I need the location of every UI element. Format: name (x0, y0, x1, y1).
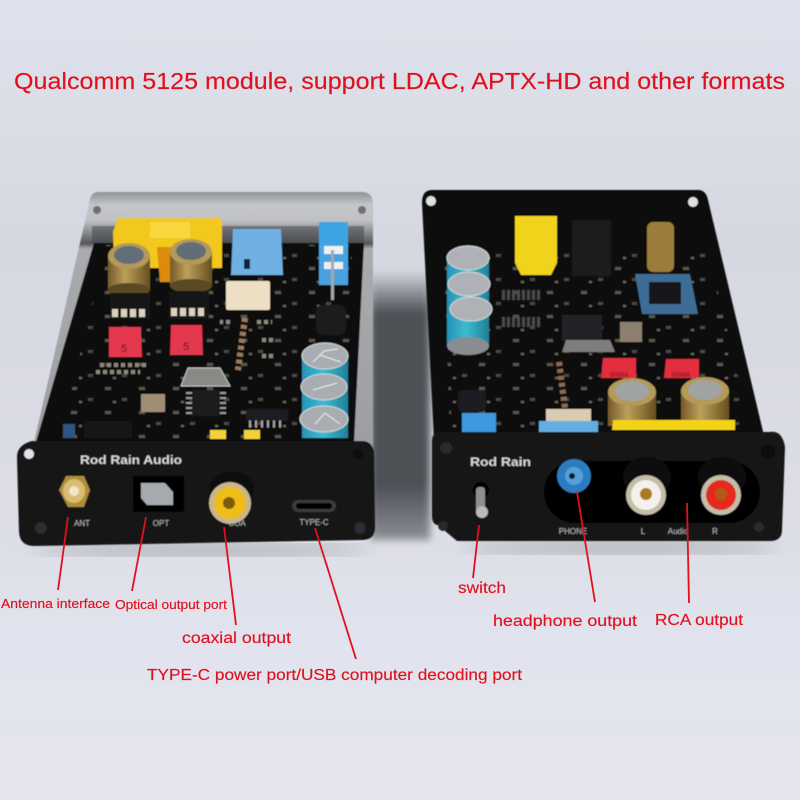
brand text: Rod Rain Audio (80, 455, 182, 467)
front panel (432, 432, 785, 541)
gold antenna connector (647, 222, 674, 272)
arrow: RCA (687, 503, 689, 603)
label: switch: switch (458, 580, 506, 597)
label: optical output port: Optical output port (115, 598, 228, 612)
oscillator (141, 394, 165, 412)
relay (546, 409, 591, 422)
recessed oval (544, 461, 760, 523)
chip rows (502, 295, 542, 322)
teal capacitor stack (447, 246, 492, 355)
red film capacitor (109, 327, 142, 357)
blue switch (319, 222, 348, 300)
red film capacitor: WIMA (671, 372, 691, 379)
silver rear plate and chassis (34, 192, 373, 450)
label: Audio: Audio (668, 527, 689, 536)
black chassis (422, 190, 765, 440)
teal capacitor stack (300, 343, 348, 438)
red film capacitor: 5 (183, 341, 189, 353)
red film capacitor: WIMA (609, 372, 629, 379)
yellow connector (515, 216, 557, 275)
arrow: headphone (577, 492, 595, 602)
label: ANT: ANT (74, 519, 90, 528)
brand text: Rod Rain (470, 457, 531, 469)
red film capacitor (664, 359, 699, 379)
icon: optical port (133, 476, 184, 512)
right device: top view and front panel (422, 190, 785, 541)
arrow: switch (473, 525, 479, 578)
blue switch (462, 413, 496, 433)
icon: left RCA jack (623, 457, 671, 515)
arrow: optical (132, 517, 146, 591)
label: L: L (641, 527, 646, 536)
label: headphone output: headphone output (493, 613, 638, 630)
DSP chip and crystal (562, 315, 615, 352)
yellow connector strip (612, 420, 735, 430)
chip (246, 409, 288, 424)
gold capacitor (108, 243, 150, 297)
label: TYPE-C: TYPE-C (299, 518, 329, 527)
gold capacitor (170, 239, 212, 293)
black optical connector (572, 220, 611, 276)
yellow pads (210, 430, 260, 439)
label: RCA output: RCA output (655, 612, 744, 629)
arrow: coaxial (224, 527, 236, 625)
small component rows (96, 322, 274, 425)
icon: USB type-C port (292, 500, 336, 512)
icon: coaxial RCA jack (209, 472, 254, 524)
title: Qualcomm 5125 module, support LDAC, APTX-HD and other formats (14, 68, 785, 94)
label: coaxial output: coaxial output (182, 630, 292, 647)
blue connector (539, 421, 598, 433)
resistor column (238, 318, 245, 370)
gold capacitor (681, 377, 729, 425)
blue connector (231, 229, 283, 275)
arrow: type-c (315, 528, 356, 659)
red film capacitor: 5 (121, 343, 127, 355)
red film capacitor (170, 325, 203, 355)
gold capacitor (608, 378, 656, 426)
red film capacitor (601, 358, 636, 379)
label: OPT: OPT (153, 519, 169, 528)
icon: right RCA jack (698, 457, 746, 515)
label: COA: COA (228, 519, 246, 528)
yellow XLR-style connector (113, 218, 222, 282)
arrow: antenna (58, 517, 68, 590)
op-amp chips (110, 291, 209, 319)
oscillator (620, 322, 642, 342)
relay (226, 281, 270, 310)
left device: top view and front panel (17, 192, 375, 546)
front panel (17, 441, 375, 546)
inductor (458, 390, 486, 412)
bluetooth module (635, 274, 698, 314)
icon: headphone jack (557, 459, 591, 493)
inductor (316, 305, 346, 335)
crystal and DSP chip (181, 368, 230, 416)
label: antenna interface: Antenna interface (1, 597, 110, 611)
circuit board (444, 250, 752, 436)
icon: toggle switch (473, 482, 489, 518)
resistor column (559, 362, 565, 408)
label: R: R (712, 527, 718, 536)
label: type-c port: TYPE-C power port/USB computer decoding port (147, 667, 523, 684)
bluetooth module (63, 421, 132, 438)
circuit board (36, 243, 364, 442)
icon: antenna connector (59, 476, 90, 507)
label: PHONE: PHONE (559, 527, 587, 536)
